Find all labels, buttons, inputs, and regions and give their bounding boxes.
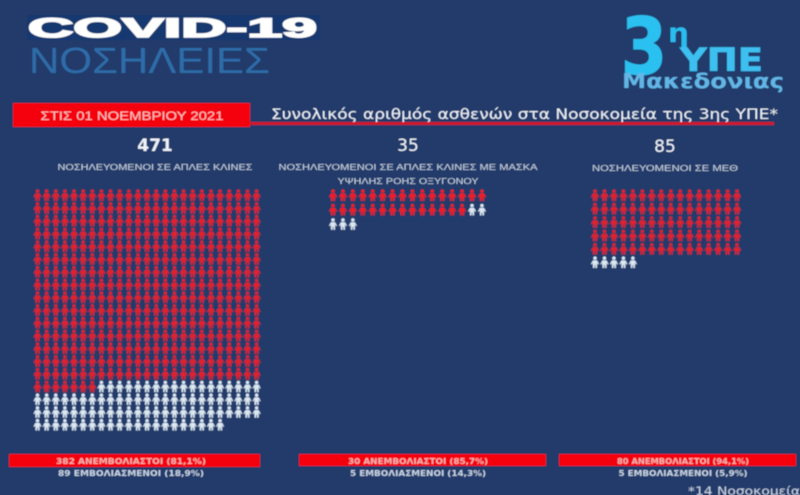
pictogram: 35 patients — [328, 189, 487, 232]
logo: 3η ΥΠΕ Μακεδονίας: ΥΠΕ — [679, 41, 763, 79]
unvaccinated bar — [299, 454, 546, 466]
date banner — [13, 103, 250, 127]
label ICU: ΝΟΣΗΛΕΥΟΜΕΝΟΙ ΣΕ ΜΕΘ — [592, 163, 739, 173]
vaccinated text: 5 ΕΜΒΟΛΙΑΣΜΕΝΟΙ (5,9%) — [618, 469, 748, 478]
panel: simple beds — [9, 136, 261, 478]
vaccinated text: 89 ΕΜΒΟΛΙΑΣΜΕΝΟΙ (18,9%) — [58, 469, 204, 478]
header text: Συνολικός αριθμός ασθενών στα Νοσοκομεία της 3ης ΥΠΕ* — [271, 107, 778, 123]
logo: 3η ΥΠΕ Μακεδονίας: Μακεδονιας — [622, 69, 784, 93]
pictogram: 471 patients — [33, 189, 261, 431]
vaccinated text: 5 ΕΜΒΟΛΙΑΣΜΕΝΟΙ (14,3%) — [350, 469, 486, 478]
logo: 3η ΥΠΕ Μακεδονίας: 3 — [621, 3, 667, 93]
unvaccinated bar — [559, 454, 796, 466]
pictogram: 85 patients — [590, 189, 742, 269]
panel: high-flow oxygen: ΥΨΗΛΗΣ ΡΟΗΣ ΟΞΥΓΟΝΟΥ — [338, 176, 479, 186]
title: COVID-19: COVID-19 — [28, 13, 317, 43]
title: COVID-19 — [27, 13, 320, 43]
number 471: 471 — [137, 136, 173, 156]
unvaccinated bar: 382 ΑΝΕΜΒΟΛΙΑΣΤΟΙ (81,1%) — [56, 457, 206, 466]
panel: high-flow oxygen — [278, 136, 546, 478]
panel: ICU — [559, 137, 796, 478]
number 85: 85 — [654, 137, 676, 157]
unvaccinated bar: 80 ΑΝΕΜΒΟΛΙΑΣΤΟΙ (94,1%) — [617, 457, 749, 466]
label high-flow oxygen: ΝΟΣΗΛΕΥΟΜΕΝΟΙ ΣΕ ΑΠΛΕΣ ΚΛΙΝΕΣ ΜΕ ΜΑΣΚΑ — [278, 162, 538, 172]
label simple beds: ΝΟΣΗΛΕΥΟΜΕΝΟΙ ΣΕ ΑΠΛΕΣ ΚΛΙΝΕΣ — [58, 162, 252, 172]
unvaccinated bar — [9, 454, 260, 467]
red rule — [250, 122, 774, 125]
logo: 3η ΥΠΕ Μακεδονίας — [621, 3, 784, 93]
date banner: ΣΤΙΣ 01 ΝΟΕΜΒΡΙΟΥ 2021 — [40, 111, 224, 123]
logo: 3η ΥΠΕ Μακεδονίας: η — [668, 18, 689, 49]
number 35: 35 — [397, 136, 419, 156]
unvaccinated bar: 30 ΑΝΕΜΒΟΛΙΑΣΤΟΙ (85,7%) — [348, 457, 488, 466]
subtitle: ΝΟΣΗΛΕΙΕΣ: ΝΟΣΗΛΕΙΕΣ — [29, 40, 270, 81]
